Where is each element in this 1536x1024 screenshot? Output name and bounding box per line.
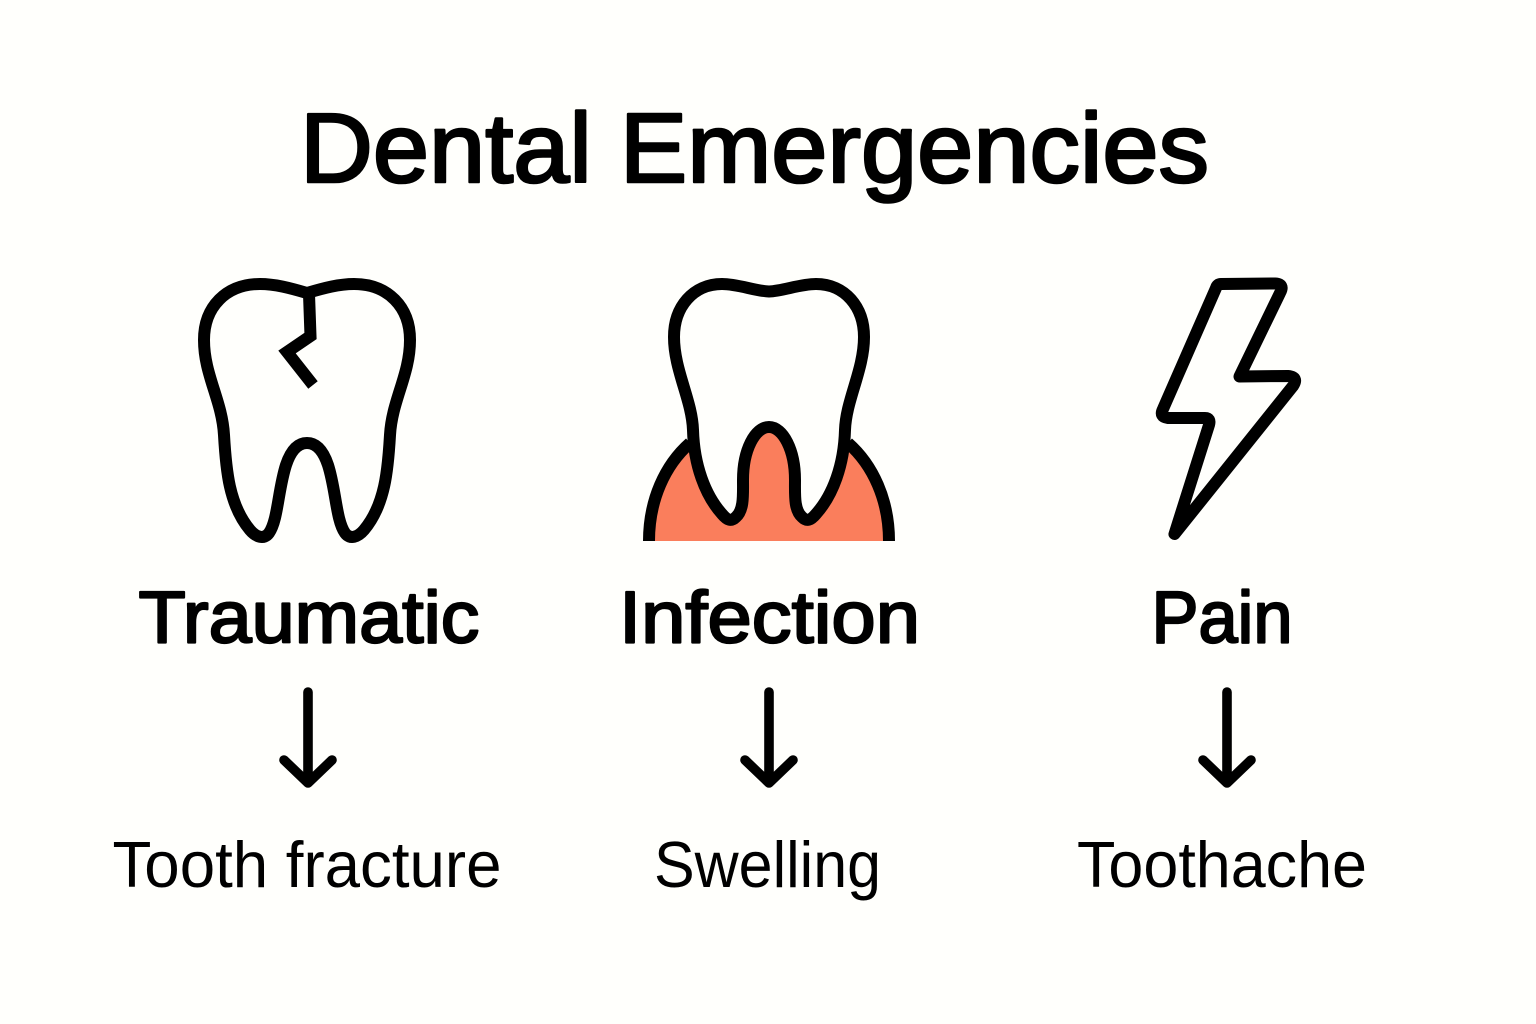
label: Swelling: Swelling — [654, 828, 881, 901]
column: traumatic — [112, 284, 502, 901]
column: infection — [619, 284, 920, 901]
label: Tooth fracture: Tooth fracture — [112, 828, 502, 901]
icon: lightning bolt — [1162, 284, 1295, 534]
arrow — [1203, 692, 1251, 783]
arrow — [284, 692, 332, 783]
label: Toothache: Toothache — [1077, 828, 1367, 901]
heading: Pain: Pain — [1152, 578, 1292, 658]
column: pain — [1077, 284, 1367, 901]
icon: cracked tooth — [204, 284, 410, 537]
heading: Traumatic: Traumatic — [138, 578, 480, 658]
title: Dental Emergencies — [300, 93, 1209, 203]
heading: Infection: Infection — [619, 578, 920, 658]
icon: swollen gum and tooth — [649, 284, 889, 541]
arrow — [745, 692, 793, 783]
